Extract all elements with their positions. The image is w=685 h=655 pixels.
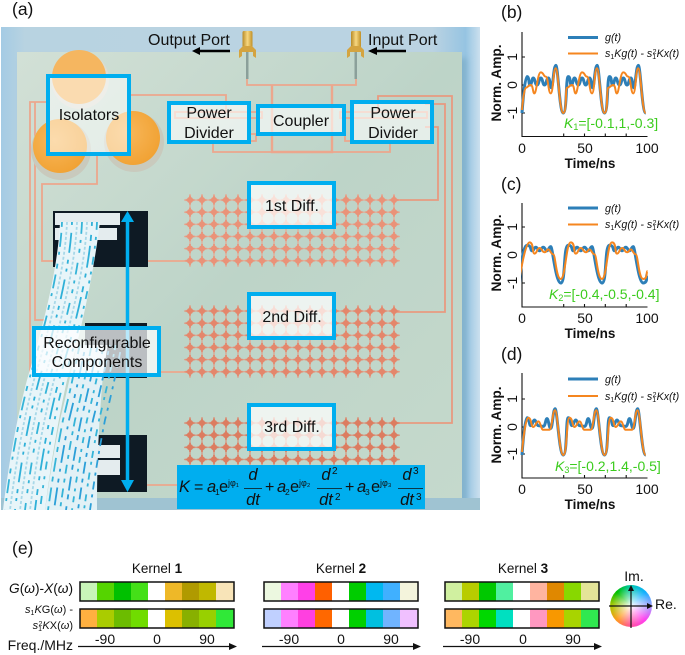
panel (b): waveform chart K1: 2	[653, 49, 657, 56]
row labels for spectra: Freq./MHz	[8, 637, 73, 653]
row labels for spectra	[8, 581, 73, 653]
formula box: e	[290, 478, 299, 496]
panel (c): waveform chart K2: Time/ns	[565, 326, 615, 341]
panel (b): waveform chart K1: 100	[635, 140, 659, 156]
formula box: e	[371, 478, 380, 496]
formula box: K	[179, 478, 191, 496]
formula box: 3	[365, 487, 370, 497]
panel (b): waveform chart K1: (b)	[501, 2, 522, 22]
row labels for spectra: 1	[38, 626, 42, 633]
kernel 2 spectra: -90	[279, 631, 299, 647]
panel (d): waveform chart K3: 2	[653, 392, 657, 399]
callout: 2nd differentiator	[249, 294, 334, 338]
panel (d): waveform chart K3: Time/ns	[565, 497, 615, 512]
formula box: 2	[335, 492, 341, 503]
panel (d): waveform chart K3: 1	[610, 397, 614, 404]
panel (c): waveform chart K2: 100	[635, 310, 659, 326]
formula box: a	[277, 478, 286, 496]
row labels for spectra: G(ω) -	[42, 604, 73, 616]
panel (d): waveform chart K3: 1	[652, 397, 656, 404]
formula box: jφ₁	[227, 478, 239, 488]
panel (d): waveform chart K3: =[-0.2,1.4,-0.5]	[569, 458, 661, 474]
kernel 1 spectra: -90	[95, 631, 115, 647]
panel (c): waveform chart K2: 2	[558, 293, 563, 303]
black reconfigurable component modules	[53, 211, 148, 492]
callout: 3rd differentiator: 3rd Diff.	[264, 419, 320, 436]
callout: 1st differentiator	[249, 183, 334, 227]
kernel 3 spectra: 90	[565, 631, 581, 647]
panel (b): waveform chart K1: 1	[652, 54, 656, 61]
panel (c): waveform chart K2: =[-0.4,-0.5,-0.4]	[563, 286, 659, 302]
formula box: dt	[319, 491, 334, 509]
row labels for spectra: X(ω)	[50, 620, 73, 632]
formula box: 3	[416, 492, 422, 503]
panel (c): waveform chart K2: -1	[504, 277, 520, 289]
panel (b): waveform chart K1: K	[564, 115, 574, 131]
row labels for spectra: G(ω)-X(ω)	[9, 581, 73, 596]
icon: complex-plane colour wheel	[610, 585, 652, 627]
panel (c): waveform chart K2: 50	[577, 310, 593, 326]
callout: right power divider	[352, 102, 432, 142]
formula box: +	[345, 479, 354, 496]
row labels for spectra: K	[34, 604, 42, 616]
callout: reconfigurable components: Reconfigurable	[43, 335, 151, 352]
callout: left power divider: Power	[186, 105, 232, 122]
callout: coupler	[258, 106, 344, 134]
panel (c): waveform chart K2: 0	[504, 251, 520, 259]
panel (c): waveform chart K2: Kg(t) - s	[614, 219, 653, 231]
panel (d): waveform chart K3: 3	[564, 465, 569, 475]
panel (d): waveform chart K3: Norm. Amp.	[489, 386, 504, 464]
kernel 1 spectra: 0	[153, 631, 161, 647]
formula box: 3	[413, 466, 419, 477]
panel (d): waveform chart K3: 1	[504, 395, 520, 403]
callout: 2nd differentiator: 2nd Diff.	[262, 309, 322, 326]
panel (d): waveform chart K3: Kg(t) - s	[614, 391, 653, 403]
panel (d): waveform chart K3: Kx(t)	[657, 391, 679, 403]
callout: 1st differentiator: 1st Diff.	[265, 198, 319, 215]
flat ribbon cables	[3, 222, 130, 510]
formula box: dt	[400, 491, 415, 509]
callout: isolators: Isolators	[59, 107, 119, 124]
callout: right power divider: Divider	[368, 125, 419, 142]
formula box: a	[357, 478, 366, 496]
formula box: jφ₂	[298, 478, 311, 488]
kernel 2 spectra: 0	[337, 631, 345, 647]
kernel 1 spectra: Kernel 1	[132, 561, 183, 576]
panel (c): waveform chart K2: 2	[653, 220, 657, 227]
input port label: Input Port	[368, 32, 438, 49]
panel (b): waveform chart K1: s	[605, 48, 610, 60]
formula box: jφ₃	[379, 478, 392, 488]
panel (b): waveform chart K1: Kg(t) - s	[614, 48, 653, 60]
kernel 3 spectra: 0	[519, 631, 527, 647]
panel (b): waveform chart K1: 50	[577, 140, 593, 156]
formula box: a	[207, 478, 216, 496]
colour wheel axes and labels: Im.	[624, 568, 644, 584]
formula box: 2	[332, 466, 338, 477]
formula box	[177, 465, 425, 509]
callout: reconfigurable components	[34, 328, 159, 375]
kernel 1 spectra: 90	[199, 631, 215, 647]
isolator: top	[51, 50, 109, 109]
panel (c): waveform chart K2: 1	[652, 225, 656, 232]
panel (d): waveform chart K3: K	[555, 458, 565, 474]
panel (c): waveform chart K2: Kx(t)	[657, 219, 679, 231]
panel (b): waveform chart K1	[489, 2, 679, 171]
panel (b): waveform chart K1: Kx(t)	[657, 48, 679, 60]
blue double arrow: reconfigurable components	[121, 211, 134, 492]
kernel 3 spectra: Kernel 3	[498, 561, 549, 576]
panel (b): waveform chart K1: 1	[573, 122, 578, 132]
formula box: e	[219, 478, 228, 496]
formula box: 2	[285, 487, 290, 497]
formula box: d	[402, 466, 412, 484]
output port label: Output Port	[148, 32, 230, 49]
panel (b): waveform chart K1: g(t)	[605, 32, 621, 44]
panel (d): waveform chart K3: 0	[518, 481, 526, 497]
row labels for spectra: s	[25, 604, 31, 616]
panel (c): waveform chart K2: (c)	[501, 174, 521, 194]
row labels for spectra: K	[42, 620, 50, 632]
panel (c): waveform chart K2: 1	[504, 223, 520, 231]
panel (b): waveform chart K1: -1	[504, 107, 520, 119]
panel (b): waveform chart K1: =[-0.1,1,-0.3]	[578, 115, 658, 131]
photo of fabricated board	[1, 27, 480, 510]
panel (b): waveform chart K1: 1	[610, 54, 614, 61]
panel label (e): (e)	[12, 538, 33, 558]
kernel 2 spectra	[262, 561, 421, 650]
panel (c): waveform chart K2: g(t)	[605, 203, 621, 215]
formula box: dt	[246, 491, 261, 509]
kernel 3 spectra	[443, 561, 602, 650]
isolator: right	[104, 111, 164, 172]
panel (d): waveform chart K3	[489, 344, 679, 512]
callout: reconfigurable components: Components	[52, 354, 142, 371]
panel (d): waveform chart K3: s	[605, 391, 610, 403]
formula box: +	[265, 479, 274, 496]
callout: isolators	[48, 76, 129, 154]
kernel 2 spectra: 90	[383, 631, 399, 647]
delay-line grids	[184, 194, 400, 267]
row labels for spectra: 2	[38, 621, 42, 628]
row labels for spectra: s	[33, 620, 39, 632]
panel (c): waveform chart K2: K	[549, 286, 559, 302]
microstrip traces	[30, 78, 452, 485]
formula box: d	[321, 466, 331, 484]
kernel 1 spectra	[78, 561, 237, 650]
panel (d): waveform chart K3: -1	[504, 448, 520, 460]
formula box: 1	[215, 487, 220, 497]
isolator: left	[31, 119, 91, 180]
callout: 3rd differentiator	[249, 405, 334, 449]
panel (b): waveform chart K1: 1	[504, 53, 520, 61]
white connector headers and wires	[55, 213, 120, 475]
SMA connectors	[239, 31, 364, 79]
callout: coupler: Coupler	[273, 113, 330, 130]
panel (b): waveform chart K1: 0	[504, 81, 520, 89]
colour wheel axes and labels: Re.	[655, 596, 677, 612]
panel (d): waveform chart K3: 100	[635, 481, 659, 497]
panel (b): waveform chart K1: Norm. Amp.	[489, 44, 504, 122]
formula box: =	[194, 479, 203, 496]
callout: left power divider: Divider	[184, 125, 235, 142]
panel (c): waveform chart K2: s	[605, 219, 610, 231]
panel (c): waveform chart K2: 1	[610, 225, 614, 232]
panel (d): waveform chart K3: (d)	[501, 344, 522, 364]
kernel 2 spectra: Kernel 2	[316, 561, 366, 576]
formula box: d	[248, 466, 258, 484]
panel (d): waveform chart K3: 50	[577, 481, 593, 497]
callout: left power divider	[169, 103, 249, 142]
panel (b): waveform chart K1: 0	[518, 140, 526, 156]
callout: right power divider: Power	[370, 105, 416, 122]
panel (c): waveform chart K2	[489, 174, 679, 341]
kernel 3 spectra: -90	[460, 631, 480, 647]
panel (c): waveform chart K2: Norm. Amp.	[489, 214, 504, 292]
row labels for spectra: 1	[31, 610, 35, 617]
panel (d): waveform chart K3: 0	[504, 423, 520, 431]
panel (d): waveform chart K3: g(t)	[605, 374, 621, 386]
panel (c): waveform chart K2: 0	[518, 310, 526, 326]
panel (b): waveform chart K1: Time/ns	[565, 156, 615, 171]
